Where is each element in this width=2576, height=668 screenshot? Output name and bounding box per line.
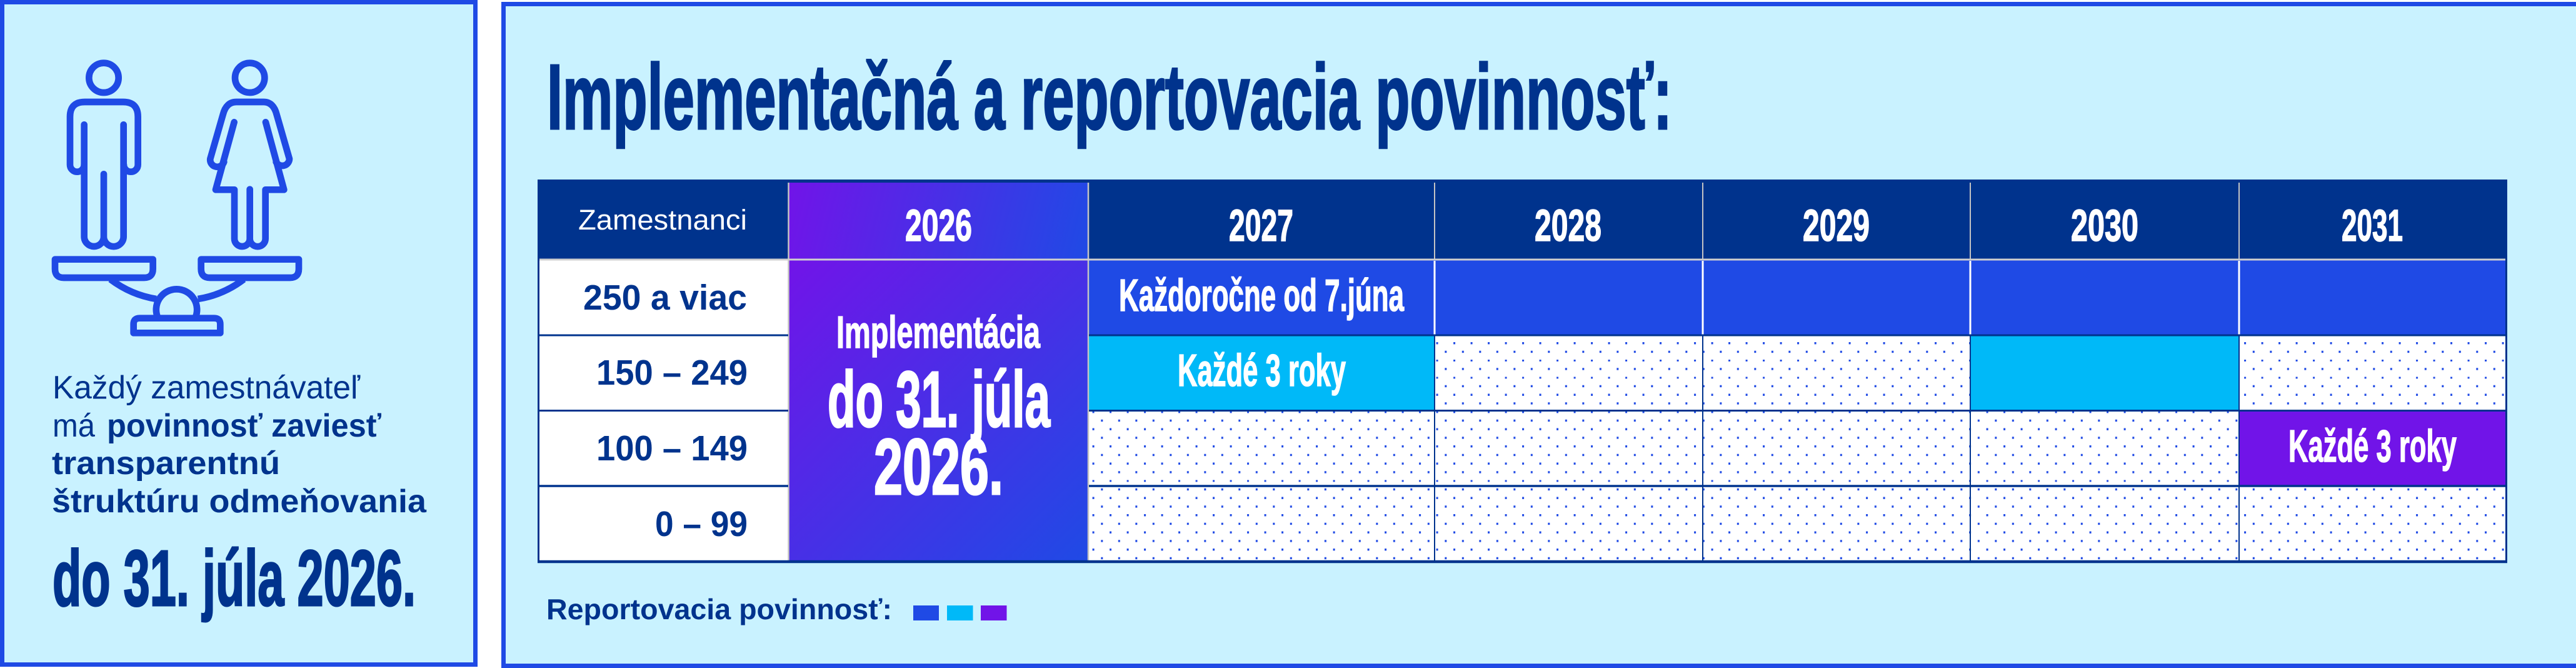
implementation label [828, 308, 1051, 511]
icon: man and woman on balanced scale [55, 63, 299, 333]
text block: employer obligation: má [53, 408, 95, 444]
bar labels: Každé 3 roky [1178, 346, 1346, 396]
title: Implementačná a reportovacia povinnosť: [547, 46, 1672, 149]
bar labels: Každé 3 roky [2288, 422, 2457, 472]
employee column cells [539, 260, 788, 562]
bar: three-year reporting 2031 [2239, 411, 2505, 486]
deadline heading: do 31. júla 2026. [53, 534, 416, 622]
implementation label: Implementácia [836, 308, 1041, 358]
implementation label: do 31. júla [828, 355, 1051, 443]
panel: implementation and reporting [504, 4, 2576, 665]
row labels: 100 – 149 [596, 428, 748, 468]
bar labels: Každoročne od 7.júna [1119, 271, 1405, 321]
bar: three-year reporting 2030 [1970, 335, 2239, 410]
row labels: 250 a viac [583, 278, 747, 318]
header labels: 2031 [2342, 201, 2403, 251]
header labels [578, 201, 2403, 251]
bar labels [1119, 271, 2457, 472]
text block: employer obligation: transparentnú [52, 445, 280, 482]
header labels: 2028 [1535, 201, 1601, 251]
implementation label: 2026. [874, 423, 1003, 511]
row labels: 150 – 249 [596, 353, 748, 393]
text block: employer obligation: povinnosť zaviesť [107, 408, 381, 444]
cell: implementation [789, 260, 1088, 562]
header labels: 2027 [1229, 201, 1293, 251]
cell: 2026 header [789, 183, 1088, 259]
dotted empty cells [1088, 335, 2505, 561]
text block: employer obligation [52, 370, 427, 520]
row labels: 0 – 99 [655, 504, 748, 544]
table header background [538, 180, 2507, 260]
bar: three-year reporting 2027 [1088, 335, 1435, 410]
text block: employer obligation: štruktúru odmeňovania [52, 483, 427, 520]
header labels: 2029 [1803, 201, 1870, 251]
table: reporting schedule [538, 180, 2507, 563]
row labels [583, 278, 748, 544]
bar: annual reporting [1088, 260, 2505, 335]
header labels: 2030 [2071, 201, 2138, 251]
header labels: Zamestnanci [578, 204, 747, 236]
legend: Reportovacia povinnosť: [546, 593, 892, 625]
header labels: 2026 [905, 201, 972, 251]
text block: employer obligation: Každý zamestnávateľ [53, 370, 361, 406]
panel: left summary [3, 3, 475, 664]
